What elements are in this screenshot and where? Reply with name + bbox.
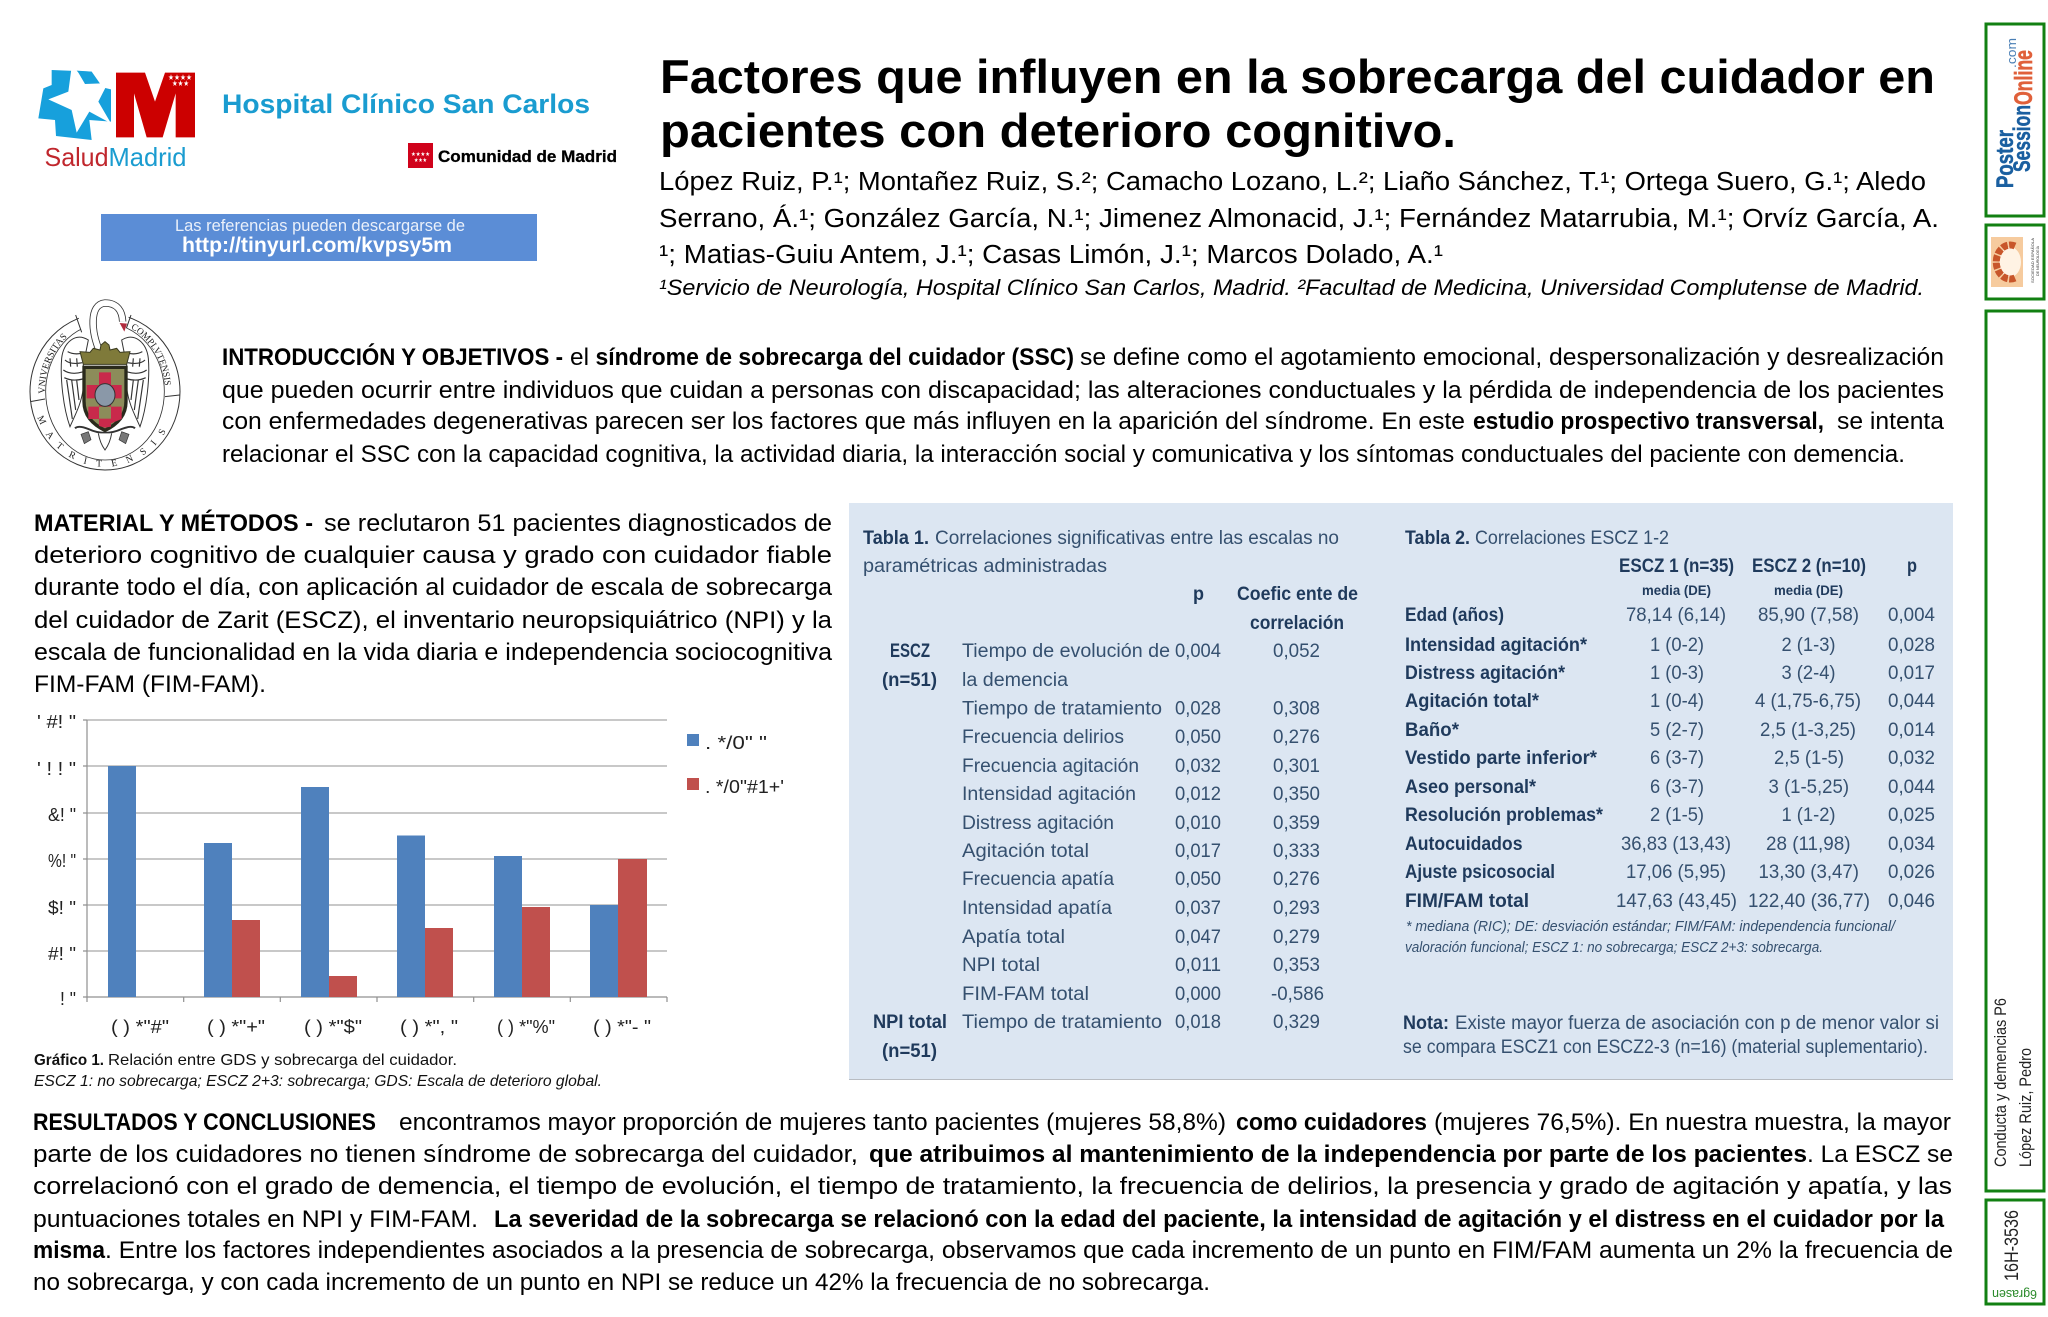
crest: Universidad Complutense: MATRITENSIS: [37, 415, 166, 467]
table 2: p: [1907, 556, 1917, 577]
panel: resultados y conclusiones: no sobrecarga, y con cada incremento de un punto en NPI se reduce un 42% la frecuencia de no sobrecarga.: [33, 1269, 1210, 1296]
panel: tables background: [849, 503, 1953, 1080]
nota: [1403, 1013, 1939, 1058]
panel: material y métodos: [34, 509, 833, 698]
table 2: 85,90 (7,58): [1758, 605, 1859, 626]
table 1: 0,308: [1273, 698, 1320, 720]
table 1: Frecuencia agitación: [962, 756, 1139, 777]
table 2 footnote: [1405, 918, 1897, 956]
table 1: [863, 528, 1358, 1062]
x axis labels: ( ) *"%": [497, 1017, 555, 1037]
table 2: 28 (11,98): [1766, 834, 1850, 855]
sidebar: poster code box: 6grasen: [1992, 1287, 2037, 1301]
table 1: Correlaciones significativas entre las escalas no: [935, 528, 1339, 549]
panel: resultados y conclusiones: RESULTADOS Y CONCLUSIONES: [33, 1109, 376, 1136]
panel: resultados y conclusiones: como cuidadores: [1236, 1109, 1427, 1136]
affiliations: ¹Servicio de Neurología, Hospital Clínico San Carlos, Madrid. ²Facultad de Medicina, Universidad Complutense de Madrid.: [659, 275, 1924, 300]
sidebar: sociedad española de neurología logo: DE NEUROLOGÍA: [2035, 246, 2040, 276]
table 2: ESCZ 1 (n=35): [1619, 556, 1734, 577]
title: pacientes con deterioro cognitivo.: [660, 104, 1456, 157]
chart caption: Relación entre GDS y sobrecarga del cuidador.: [108, 1052, 457, 1069]
table 1: (n=51): [882, 670, 937, 691]
table 2: 2,5 (1-3,25): [1760, 720, 1856, 741]
panel: resultados y conclusiones: que atribuimos al mantenimiento de la independencia por parte de los pacientes: [869, 1141, 1807, 1168]
authors: ¹; Matias-Guiu Antem, J.¹; Casas Limón, J.¹; Marcos Dolado, A.¹: [659, 241, 1443, 269]
panel: introducción y objetivos: que pueden ocurrir entre individuos que cuidan a personas con discapacidad; las alteraciones conductuales y la pérdida de independencia de los pacientes: [222, 377, 1944, 404]
table 2: Intensidad agitación*: [1405, 635, 1588, 656]
table 2: Tabla 2.: [1405, 528, 1470, 549]
table 1: 0,018: [1175, 1012, 1221, 1033]
table 2: 1 (0-2): [1650, 635, 1704, 656]
table 1: Coefic ente de: [1237, 584, 1358, 605]
table 2: Correlaciones ESCZ 1-2: [1475, 528, 1669, 549]
sidebar: sociedad española de neurología logo: [1986, 225, 2044, 299]
panel: resultados y conclusiones: correlacionó con el grado de demencia, el tiempo de evolución, el tiempo de tratamiento, la frecuencia de delirios, la presencia y grado de agitación y apatía, y las: [33, 1173, 1952, 1200]
x axis labels: [111, 1017, 651, 1037]
legend: . */0"#1+': [705, 777, 784, 797]
panel: introducción y objetivos: [222, 343, 1945, 468]
table 1: ESCZ: [890, 641, 930, 662]
references banner: http://tinyurl.com/kvpsy5m: [182, 234, 452, 257]
nota: se compara ESCZ1 con ESCZ2-3 (n=16) (material suplementario).: [1403, 1037, 1928, 1058]
x axis labels: ( ) *"#": [111, 1017, 169, 1037]
table 2: 0,032: [1888, 748, 1935, 769]
panel: introducción y objetivos: estudio prospectivo transversal,: [1473, 408, 1824, 435]
sidebar: sociedad española de neurología logo: SOCIEDAD ESPAÑOLA: [2030, 238, 2035, 283]
panel: resultados y conclusiones: puntuaciones totales en NPI y FIM-FAM.: [33, 1206, 478, 1233]
table 1: Distress agitación: [962, 813, 1114, 834]
table 2: Vestido parte inferior*: [1405, 748, 1598, 769]
table 2: Agitación total*: [1405, 691, 1540, 712]
table 2: Autocuidados: [1405, 834, 1522, 855]
panel: material y métodos: escala de funcionalidad en la vida diaria e independencia sociocognitiva: [34, 639, 833, 666]
table 1: 0,276: [1273, 727, 1320, 748]
table 1: 0,004: [1175, 641, 1221, 662]
crest: Universidad Complutense: COMPLVTENSIS: [132, 324, 171, 385]
table 1: Agitación total: [962, 841, 1089, 862]
y axis labels: $! ": [48, 898, 76, 918]
table 2: 147,63 (43,45): [1616, 891, 1737, 912]
sidebar: PosterSessionOnline box: Online: [2010, 50, 2038, 105]
authors: López Ruiz, P.¹; Montañez Ruiz, S.²; Camacho Lozano, L.²; Liaño Sánchez, T.¹; Ortega Suero, G.¹; Aledo: [659, 168, 1926, 196]
bars: ESCZ 2+3: [232, 859, 647, 997]
table 1: Tiempo de evolución de: [962, 641, 1170, 662]
table 1: 0,012: [1175, 784, 1221, 805]
sidebar: poster code box: 16H-3536: [2002, 1210, 2023, 1281]
table 2: 2 (1-5): [1650, 805, 1704, 826]
table 1: 0,010: [1175, 813, 1221, 834]
table 1: 0,279: [1273, 927, 1320, 948]
table 2: 6 (3-7): [1650, 748, 1704, 769]
chart caption: [34, 1052, 602, 1090]
table 2: Distress agitación*: [1405, 663, 1566, 684]
panel: introducción y objetivos: se intenta: [1837, 408, 1945, 435]
table 2: Baño*: [1405, 720, 1460, 741]
table 2: Aseo personal*: [1405, 777, 1537, 798]
panel: material y métodos: FIM-FAM (FIM-FAM).: [34, 671, 266, 698]
logo: SaludMadrid: ★★★: [172, 79, 189, 88]
panel: introducción y objetivos: el: [570, 344, 589, 371]
table 1: -0,586: [1271, 984, 1324, 1005]
y axis labels: ' #! ": [37, 712, 76, 732]
panel: resultados y conclusiones: parte de los cuidadores no tienen síndrome de sobrecarga del cuidador,: [33, 1141, 858, 1168]
logo: Comunidad de Madrid: Comunidad de Madrid: [438, 147, 617, 166]
sidebar: PosterSessionOnline box: .com: [2004, 38, 2019, 68]
table 2: media (DE): [1642, 582, 1711, 598]
table 1: 0,000: [1175, 984, 1221, 1005]
table 1: NPI total: [962, 955, 1040, 976]
y axis labels: [37, 712, 76, 1009]
sidebar: PosterSessionOnline box: Poster: [1992, 130, 2019, 188]
table 2: 0,044: [1888, 691, 1935, 712]
logo: Comunidad de Madrid: ★★★★: [411, 151, 430, 158]
table 2: 0,026: [1888, 862, 1935, 883]
table 1: 0,276: [1273, 869, 1320, 890]
table 2: 3 (1-5,25): [1768, 777, 1849, 798]
table 2: 1 (0-4): [1650, 691, 1704, 712]
legend: [687, 733, 784, 797]
bars: ESCZ 1: [108, 766, 618, 997]
table 1: 0,011: [1175, 955, 1221, 976]
table 1: 0,329: [1273, 1012, 1320, 1033]
panel: material y métodos: deterioro cognitivo de cualquier causa y grado con cuidador fiable: [34, 542, 832, 569]
table 1: correlación: [1250, 613, 1344, 634]
table 2: FIM/FAM total: [1405, 891, 1529, 912]
x axis labels: ( ) *", ": [400, 1017, 458, 1037]
table 1: Frecuencia apatía: [962, 869, 1114, 890]
table 1: Tiempo de tratamiento: [962, 1012, 1162, 1033]
panel: introducción y objetivos: con enfermedades degenerativas parecen ser los factores que más influyen en la aparición del síndrome. En este: [222, 408, 1465, 435]
legend: . */0" ": [705, 733, 767, 753]
table 2: 2,5 (1-5): [1774, 748, 1844, 769]
x axis labels: ( ) *"- ": [593, 1017, 651, 1037]
table 2: Ajuste psicosocial: [1405, 862, 1555, 883]
logo: SaludMadrid: ★★★★: [168, 73, 192, 82]
x axis labels: ( ) *"$": [304, 1017, 362, 1037]
crest: Universidad Complutense: [30, 299, 180, 470]
table 1: 0,052: [1273, 641, 1320, 662]
table 2 footnote: * mediana (RIC); DE: desviación estándar; FIM/FAM: independencia funcional/: [1406, 918, 1897, 935]
table 1: FIM-FAM total: [962, 984, 1089, 1005]
table 1: 0,032: [1175, 756, 1221, 777]
table 1: Intensidad agitación: [962, 784, 1136, 805]
table 2: Resolución problemas*: [1405, 805, 1604, 826]
title: [660, 50, 1935, 157]
table 2: 0,046: [1888, 891, 1935, 912]
table 1: 0,301: [1273, 756, 1320, 777]
sidebar: PosterSessionOnline box: Session: [2009, 105, 2036, 172]
table 1: Tiempo de tratamiento: [962, 698, 1162, 720]
table 1: Tabla 1.: [863, 528, 929, 549]
table 1: paramétricas administradas: [863, 556, 1107, 577]
bar chart: gráfico 1: [37, 712, 784, 1037]
logo: SaludMadrid: Madrid: [108, 142, 186, 172]
table 1: (n=51): [882, 1041, 937, 1062]
table 1: p: [1193, 584, 1204, 605]
table 1: NPI total: [873, 1012, 947, 1033]
panel: resultados y conclusiones: encontramos mayor proporción de mujeres tanto pacientes (mujeres 58,8%): [399, 1109, 1226, 1136]
crest: Universidad Complutense: VNIVERSITAS: [38, 333, 66, 394]
chart caption: ESCZ 1: no sobrecarga; ESCZ 2+3: sobrecarga; GDS: Escala de deterioro global.: [34, 1073, 602, 1090]
sidebar: session and author box: Conducta y demencias P6: [1992, 998, 2010, 1167]
table 1: Frecuencia delirios: [962, 727, 1124, 748]
table 1: 0,028: [1175, 698, 1221, 720]
nota: Nota:: [1403, 1013, 1449, 1034]
table 2: 36,83 (13,43): [1621, 834, 1731, 855]
logo: Comunidad de Madrid: ★★★: [414, 157, 427, 164]
y axis labels: &! ": [48, 805, 76, 825]
panel: resultados y conclusiones: La severidad de la sobrecarga se relacionó con la edad del paciente, la intensidad de agitación y el distress en el cuidador por la: [494, 1206, 1945, 1233]
references banner: [101, 214, 537, 261]
table 1: 0,359: [1273, 813, 1320, 834]
table 2: 0,014: [1888, 720, 1935, 741]
panel: material y métodos: del cuidador de Zarit (ESCZ), el inventario neuropsiquiátrico (NPI) y la: [34, 607, 833, 634]
panel: introducción y objetivos: relacionar el SSC con la capacidad cognitiva, la actividad diaria, la interacción social y comunicativa y los síntomas conductuales del paciente con demencia.: [222, 441, 1905, 468]
sidebar: session and author box: [1986, 311, 2044, 1191]
authors: [659, 168, 1939, 269]
chart caption: Gráfico 1.: [34, 1052, 104, 1069]
table 2 footnote: valoración funcional; ESCZ 1: no sobrecarga; ESCZ 2+3: sobrecarga.: [1405, 939, 1823, 956]
table 2: 0,034: [1888, 834, 1935, 855]
panel: material y métodos: se reclutaron 51 pacientes diagnosticados de: [324, 510, 832, 537]
table 2: 17,06 (5,95): [1626, 862, 1726, 883]
table 2: 78,14 (6,14): [1626, 605, 1726, 626]
x axis labels: ( ) *"+": [207, 1017, 265, 1037]
y axis labels: %! ": [48, 851, 76, 871]
nota: Existe mayor fuerza de asociación con p de menor valor si: [1455, 1013, 1939, 1034]
table 1: 0,293: [1273, 898, 1320, 919]
hospital name: Hospital Clínico San Carlos: [222, 89, 590, 119]
table 2: 1 (0-3): [1650, 663, 1704, 684]
table 1: 0,050: [1175, 727, 1221, 748]
table 2: 4 (1,75-6,75): [1755, 691, 1861, 712]
panel: introducción y objetivos: INTRODUCCIÓN Y OBJETIVOS -: [222, 343, 563, 371]
table 1: Apatía total: [962, 927, 1065, 948]
y axis labels: #! ": [48, 944, 76, 964]
table 1: 0,047: [1175, 927, 1221, 948]
table 1: 0,037: [1175, 898, 1221, 919]
table 2: 5 (2-7): [1650, 720, 1704, 741]
table 2: Edad (años): [1405, 605, 1504, 626]
table 2: 13,30 (3,47): [1758, 862, 1859, 883]
authors: Serrano, Á.¹; González García, N.¹; Jimenez Almonacid, J.¹; Fernández Matarrubia, M.¹; Orvíz García, A.: [659, 204, 1939, 233]
table 1: Intensidad apatía: [962, 898, 1112, 919]
panel: resultados y conclusiones: (mujeres 76,5%). En nuestra muestra, la mayor: [1434, 1109, 1951, 1136]
sidebar: poster code box: [1986, 1200, 2044, 1304]
table 2: 0,017: [1888, 663, 1935, 684]
table 2: 6 (3-7): [1650, 777, 1704, 798]
panel: material y métodos: MATERIAL Y MÉTODOS -: [34, 509, 313, 537]
table 1: 0,350: [1273, 784, 1320, 805]
logo: Comunidad de Madrid: [408, 143, 617, 168]
sidebar: PosterSessionOnline box: [1986, 24, 2044, 216]
panel: introducción y objetivos: se define como el agotamiento emocional, despersonalización y desrealización: [1080, 344, 1944, 371]
title: Factores que influyen en la sobrecarga del cuidador en: [660, 50, 1935, 103]
table 2: 122,40 (36,77): [1748, 891, 1870, 912]
panel: resultados y conclusiones: . Entre los factores independientes asociados a la presencia de sobrecarga, observamos que cada incremento de un punto en FIM/FAM aumenta un 2% la frecuencia de: [105, 1237, 1953, 1264]
table 1: 0,353: [1273, 955, 1320, 976]
table 2: 0,044: [1888, 777, 1935, 798]
table 1: 0,050: [1175, 869, 1221, 890]
sidebar: session and author box: López Ruiz, Pedro: [2017, 1048, 2035, 1167]
panel: resultados y conclusiones: [33, 1109, 1953, 1296]
table 2: 2 (1-3): [1782, 635, 1836, 656]
panel: material y métodos: durante todo el día, con aplicación al cuidador de escala de sobrecarga: [34, 574, 833, 601]
table 2: 0,004: [1888, 605, 1935, 626]
panel: resultados y conclusiones: . La ESCZ se: [1807, 1141, 1953, 1168]
y axis labels: ! ": [60, 989, 76, 1009]
table 1: 0,333: [1273, 841, 1320, 862]
panel: introducción y objetivos: síndrome de sobrecarga del cuidador (SSC): [596, 344, 1074, 371]
panel: resultados y conclusiones: misma: [33, 1237, 106, 1264]
table 2: [1403, 528, 1939, 1058]
table 2: 0,028: [1888, 635, 1935, 656]
logo: SaludMadrid: Salud: [44, 142, 108, 172]
table 2: 0,025: [1888, 805, 1935, 826]
y axis labels: ' ! ! ": [37, 759, 76, 779]
logo: SaludMadrid: [38, 67, 195, 172]
table 1: 0,017: [1175, 841, 1221, 862]
references banner: Las referencias pueden descargarse de: [175, 216, 465, 235]
table 2: ESCZ 2 (n=10): [1752, 556, 1866, 577]
table 2: 1 (1-2): [1782, 805, 1836, 826]
table 2: 3 (2-4): [1782, 663, 1836, 684]
table 2: media (DE): [1774, 582, 1843, 598]
table 1: la demencia: [962, 670, 1068, 691]
